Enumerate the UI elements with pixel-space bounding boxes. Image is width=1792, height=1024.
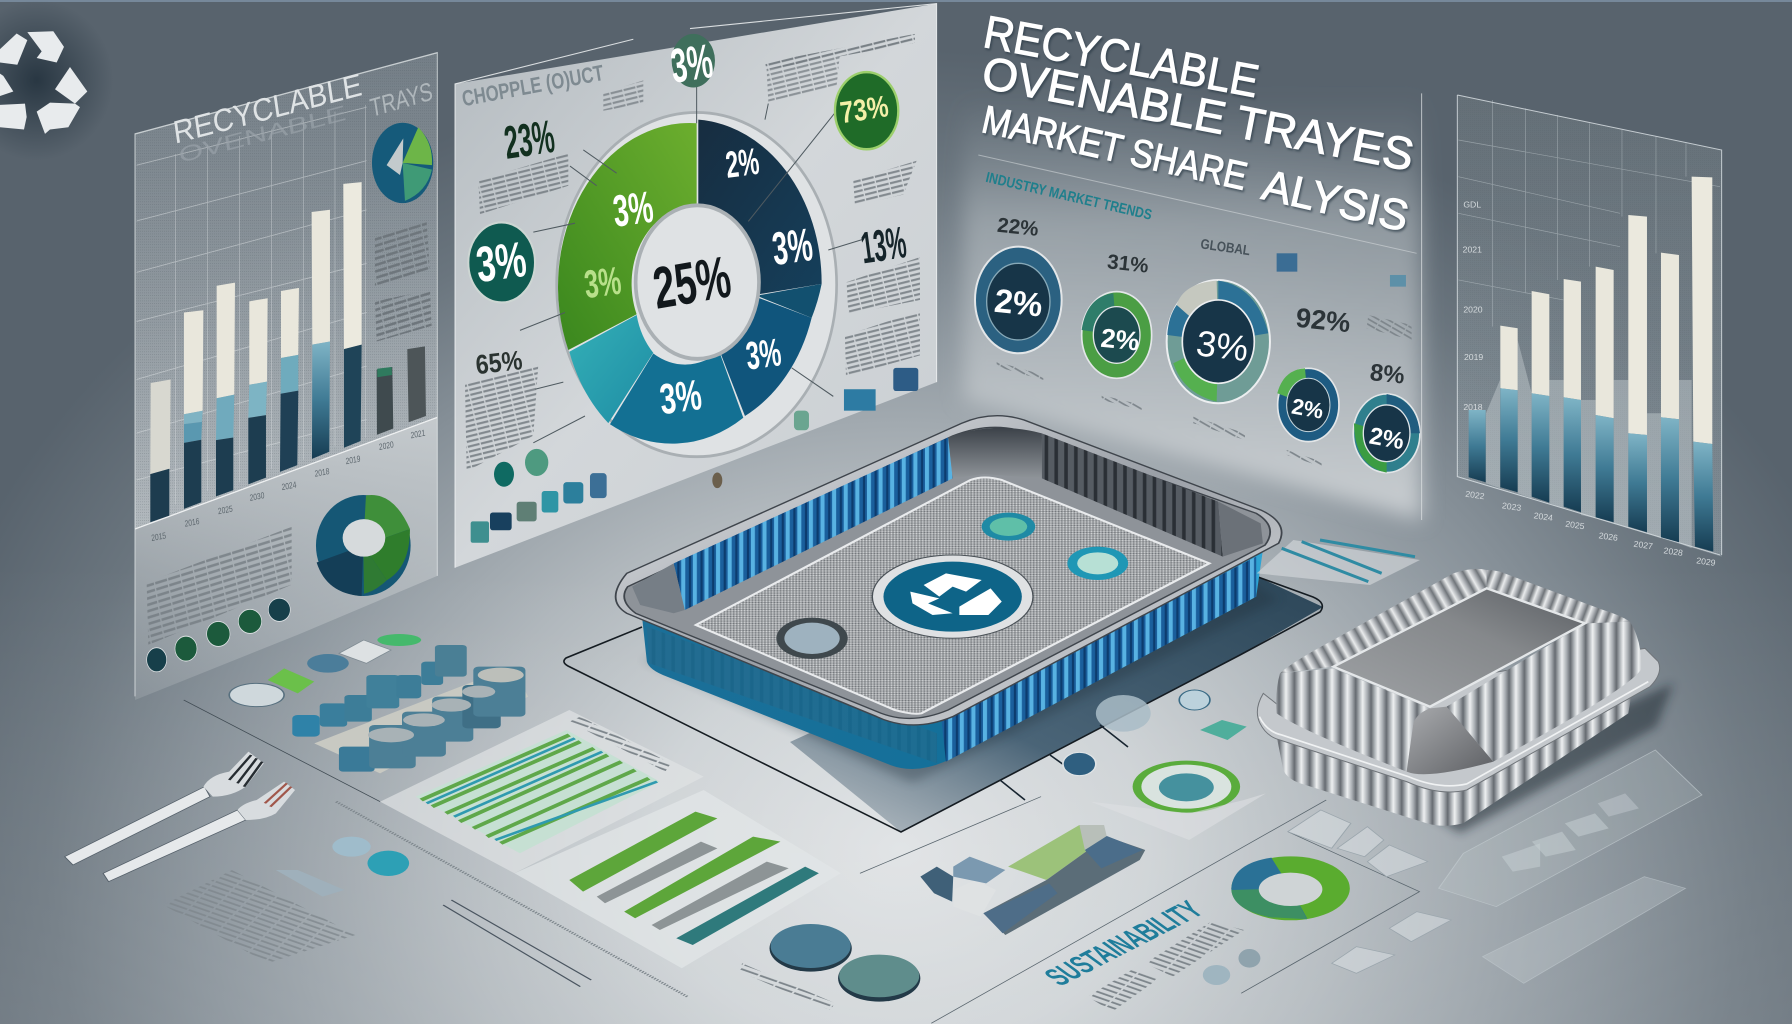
- green donut chart: [1231, 856, 1350, 920]
- tray inner wall right: [1042, 433, 1223, 557]
- pie centre: [636, 205, 759, 359]
- percentage values: [473, 34, 909, 423]
- floor graphics right: [860, 690, 1702, 1023]
- percentage values: 73%: [838, 89, 890, 130]
- status dots: [147, 598, 290, 672]
- percentage values: 3%: [744, 331, 783, 379]
- pie slice: deep blue sliver: [757, 284, 822, 318]
- dial notes: [997, 315, 1412, 467]
- axis labels: 2024: [1533, 510, 1554, 523]
- lid ridges left: [1280, 569, 1487, 673]
- bar gaps: [1486, 340, 1692, 548]
- dial captions: [996, 214, 1406, 390]
- short rules: [443, 900, 591, 987]
- dial captions: 31%: [1106, 250, 1150, 278]
- axis labels: 2027: [1633, 539, 1654, 551]
- lid top: [1333, 588, 1585, 707]
- axis labels: 2016: [184, 516, 200, 529]
- title: ALYSIS: [1258, 161, 1413, 241]
- tray inner wall left: [674, 437, 953, 610]
- axis labels: 2030: [249, 490, 265, 503]
- clamshell: metal container with lid: [1257, 569, 1673, 833]
- axis labels: 2024: [281, 479, 297, 492]
- badge: left: [468, 222, 535, 302]
- small icons row: [471, 368, 918, 543]
- lower donut chart: [316, 495, 411, 596]
- axis labels: 2025: [1565, 519, 1585, 531]
- icon: recycling symbol top left: [0, 0, 113, 161]
- ghost strip: [1483, 877, 1685, 983]
- dial 4: [1277, 368, 1339, 442]
- fork 1: [65, 752, 264, 865]
- panel: right bar chart: [1457, 95, 1722, 568]
- dial captions: 8%: [1369, 359, 1406, 390]
- dial 2: 2%: [1099, 323, 1141, 357]
- small round icons: [1063, 690, 1260, 985]
- chart title: RECYCLABLE: [171, 67, 364, 152]
- percentage values: 25%: [649, 244, 735, 322]
- pie slice: teal blue: [610, 352, 743, 444]
- floor lines: [184, 700, 380, 802]
- title: OVENABLE TRAYES: [978, 46, 1418, 181]
- dial 1: [975, 247, 1062, 353]
- tray: recyclable ovenable tray: [616, 416, 1282, 783]
- tray floor: [696, 477, 1209, 714]
- tray interior: [624, 427, 1270, 718]
- axis labels: 2025: [217, 504, 234, 516]
- tray small badges: [776, 513, 1128, 659]
- wave chart sheet: [380, 710, 704, 873]
- ghost table: [1439, 750, 1702, 907]
- percentage values: 2%: [723, 140, 761, 186]
- badge: top: [672, 34, 715, 87]
- mini pie chart: [372, 123, 433, 203]
- axis labels: 2023: [1501, 500, 1522, 513]
- percentage values: 23%: [501, 109, 558, 169]
- leader lines: [520, 86, 863, 443]
- tray recycling badge: [872, 555, 1033, 638]
- small floor icons: [229, 634, 421, 707]
- dial captions: 92%: [1294, 302, 1352, 338]
- percentage values: 3%: [769, 218, 815, 275]
- floor base sheet and outline: [564, 577, 1323, 832]
- sub-header labels: GLOBAL: [1200, 235, 1252, 258]
- bars: [1469, 177, 1713, 552]
- tray outer wall: [642, 550, 1263, 769]
- title: RECYCLABLE: [980, 5, 1263, 107]
- axis labels: 2019: [1464, 352, 1483, 362]
- lid right face: [1447, 622, 1642, 762]
- axis labels: 2019: [345, 454, 361, 467]
- hatch blocks: [1088, 922, 1244, 1012]
- axis labels: GDL: [1463, 199, 1481, 209]
- side text blocks: [375, 221, 432, 341]
- chart title: [171, 67, 434, 168]
- dial 3: [1167, 280, 1270, 403]
- green badge: [1090, 761, 1266, 840]
- dial captions: 22%: [996, 214, 1040, 241]
- title: MARKET SHARE: [978, 97, 1251, 199]
- axis labels: 2028: [1663, 545, 1684, 558]
- sheet edges: [860, 797, 1419, 1023]
- badge: right green: [835, 72, 898, 149]
- axis labels: 2029: [1696, 555, 1716, 568]
- percentage values: 3%: [668, 34, 716, 93]
- axis labels: 2020: [378, 439, 395, 452]
- lid ridges right: [1487, 570, 1630, 623]
- percentage values: 13%: [858, 218, 909, 274]
- sub-header labels: [1200, 235, 1406, 287]
- 3D bar graphic: [920, 825, 1145, 935]
- container base: [1277, 693, 1632, 826]
- axis labels: 2018: [1463, 402, 1483, 412]
- lid corner: [1407, 707, 1493, 774]
- ghost card row: [1288, 810, 1451, 973]
- title: [978, 5, 1418, 241]
- pie ring: [557, 112, 837, 457]
- panel: left bar chart: [135, 53, 437, 700]
- dial 3: 3%: [1194, 322, 1251, 369]
- hatched text block: [163, 870, 355, 963]
- axis labels: 2018: [314, 466, 330, 479]
- axis labels: 2022: [1465, 489, 1485, 501]
- percentage values: 3%: [657, 370, 704, 423]
- pie slice: blue: [720, 297, 812, 416]
- tray rim: [616, 416, 1282, 725]
- dial 4: 2%: [1290, 394, 1325, 424]
- caption lines: [739, 963, 835, 1010]
- panel: title and KPI dials: [963, 5, 1422, 520]
- header band: INDUSTRY MARKET TRENDS: [984, 170, 1153, 224]
- text blocks: [465, 34, 920, 471]
- teal garbled label: SUSTAINABILITY: [1037, 896, 1212, 991]
- lower text block: [147, 527, 292, 645]
- blue-grey discs: [770, 924, 920, 1002]
- pie slice: light teal: [569, 315, 653, 423]
- pie slice: navy: [698, 120, 822, 295]
- chart title: TRAYS: [368, 76, 434, 122]
- floor graphics left: [65, 634, 920, 1010]
- pie slice: green: [558, 123, 697, 350]
- percentage values: 3%: [473, 231, 529, 293]
- dial 5: 2%: [1367, 423, 1406, 455]
- chart title: OVENABLE: [177, 102, 348, 168]
- axis labels: 2020: [1463, 305, 1483, 315]
- percentage values: 3%: [582, 260, 623, 307]
- fork 2: [103, 782, 295, 882]
- dial 5: [1353, 394, 1420, 473]
- panel: central pie chart: [455, 4, 937, 568]
- hatched rule: [336, 802, 687, 997]
- axis labels: [151, 428, 426, 543]
- striped legend sheet beside tray: [1257, 540, 1420, 585]
- axis labels: [1463, 199, 1716, 568]
- axis labels: 2015: [151, 530, 167, 543]
- 3D block row: [292, 645, 528, 773]
- tray inner wall back corner: [948, 428, 1042, 478]
- dial 2: [1082, 292, 1152, 378]
- panel label: CHOPPLE (O)UCT: [460, 60, 605, 112]
- percentage values: 65%: [474, 344, 524, 380]
- axis labels: 2021: [1463, 245, 1482, 255]
- stacked bars: [150, 182, 426, 522]
- axis labels: 2021: [410, 428, 426, 441]
- round floor badges: [276, 837, 409, 897]
- lid left face: [1276, 668, 1430, 772]
- container flange: [1257, 648, 1660, 792]
- dial 1: 2%: [992, 283, 1044, 325]
- percentage values: 3%: [611, 183, 656, 237]
- axis labels: 2026: [1598, 530, 1619, 543]
- green bars sheet: [514, 790, 841, 968]
